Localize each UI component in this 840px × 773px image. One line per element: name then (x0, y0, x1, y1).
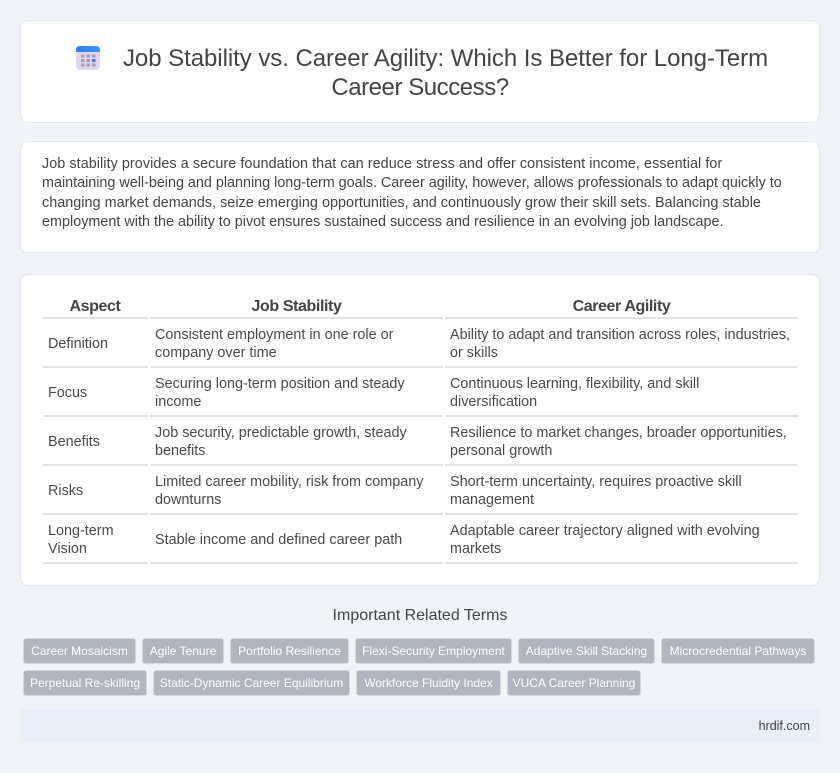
row: benefits: Resilience to market changes, broader opportunities, (450, 425, 787, 441)
tag (23, 638, 136, 664)
related terms heading: Important Related Terms (333, 607, 507, 624)
tag: Agile Tenure (150, 644, 216, 658)
row: risks: downturns (155, 492, 221, 508)
row: definition: company over time (155, 345, 277, 361)
row: long-term vision: markets (450, 541, 501, 557)
title: Job Stability vs. Career Agility: Which Is Better for Long-Term (123, 45, 768, 72)
row: definition (48, 327, 790, 361)
tag (356, 670, 501, 696)
row: focus: Focus (48, 385, 87, 401)
row: benefits: Benefits (48, 434, 100, 450)
row: focus (48, 376, 699, 410)
tag: Perpetual Re-skilling (30, 676, 140, 690)
tag: Portfolio Resilience (238, 644, 341, 658)
tag: VUCA Career Planning (513, 676, 635, 690)
table header: aspect: Aspect (70, 298, 120, 315)
row: long-term vision: Long-term (48, 523, 114, 539)
intro paragraph: changing market demands, seize emerging opportunities, and continuously grow their skill sets. Balancing stable (42, 195, 761, 211)
row: long-term vision: Stable income and defined career path (155, 532, 402, 548)
footer bar (20, 709, 820, 743)
footer source: hrdif.com (759, 719, 810, 733)
title (123, 45, 768, 101)
intro paragraph: Job stability provides a secure foundation that can reduce stress and offer consistent income, essential for (42, 156, 722, 172)
tag (518, 638, 655, 664)
row: benefits: Job security, predictable growth, steady (155, 425, 407, 441)
icon: calendar (76, 46, 100, 70)
row: benefits (48, 425, 787, 459)
row: risks: management (450, 492, 534, 508)
row: long-term vision: Vision (48, 541, 87, 557)
comparison table card (20, 274, 820, 586)
tag (142, 638, 224, 664)
row: long-term vision: Adaptable career trajectory aligned with evolving (450, 523, 760, 539)
row: definition: Consistent employment in one role or (155, 327, 393, 343)
tag: Career Mosaicism (31, 644, 128, 658)
tag (661, 638, 815, 664)
row: benefits: benefits (155, 443, 205, 459)
table header: job stability: Job Stability (252, 298, 341, 315)
header card (20, 20, 820, 123)
row: risks: Limited career mobility, risk from company (155, 474, 423, 490)
intro text card (20, 141, 820, 253)
tag: Microcredential Pathways (670, 644, 806, 658)
row: focus: Continuous learning, flexibility, and skill (450, 376, 699, 392)
row: focus: income (155, 394, 201, 410)
row: risks (48, 474, 742, 508)
row: focus: Securing long-term position and steady (155, 376, 405, 392)
row: definition: Definition (48, 336, 108, 352)
tag: Workforce Fluidity Index (364, 676, 493, 690)
tag: Flexi-Security Employment (362, 644, 505, 658)
row: long-term vision (48, 523, 760, 557)
tag (507, 670, 641, 696)
tag (153, 670, 350, 696)
tag: Adaptive Skill Stacking (526, 644, 647, 658)
tag (23, 670, 147, 696)
row: benefits: personal growth (450, 443, 552, 459)
row: definition: or skills (450, 345, 498, 361)
related terms tags (23, 638, 815, 696)
tag (355, 638, 512, 664)
title: Career Success? (331, 74, 509, 101)
row: focus: diversification (450, 394, 537, 410)
intro paragraph: employment with the ability to pivot ensures sustained success and resilience in an evolving job landscape. (42, 214, 724, 230)
table header: career agility: Career Agility (573, 298, 670, 315)
row: risks: Risks (48, 483, 83, 499)
tag (230, 638, 349, 664)
row: definition: Ability to adapt and transition across roles, industries, (450, 327, 790, 343)
row: risks: Short-term uncertainty, requires proactive skill (450, 474, 742, 490)
tag: Static-Dynamic Career Equilibrium (160, 676, 343, 690)
intro paragraph: maintaining well-being and planning long-term goals. Career agility, however, allows professionals to adapt quickly to (42, 175, 782, 191)
intro paragraph (42, 156, 782, 230)
